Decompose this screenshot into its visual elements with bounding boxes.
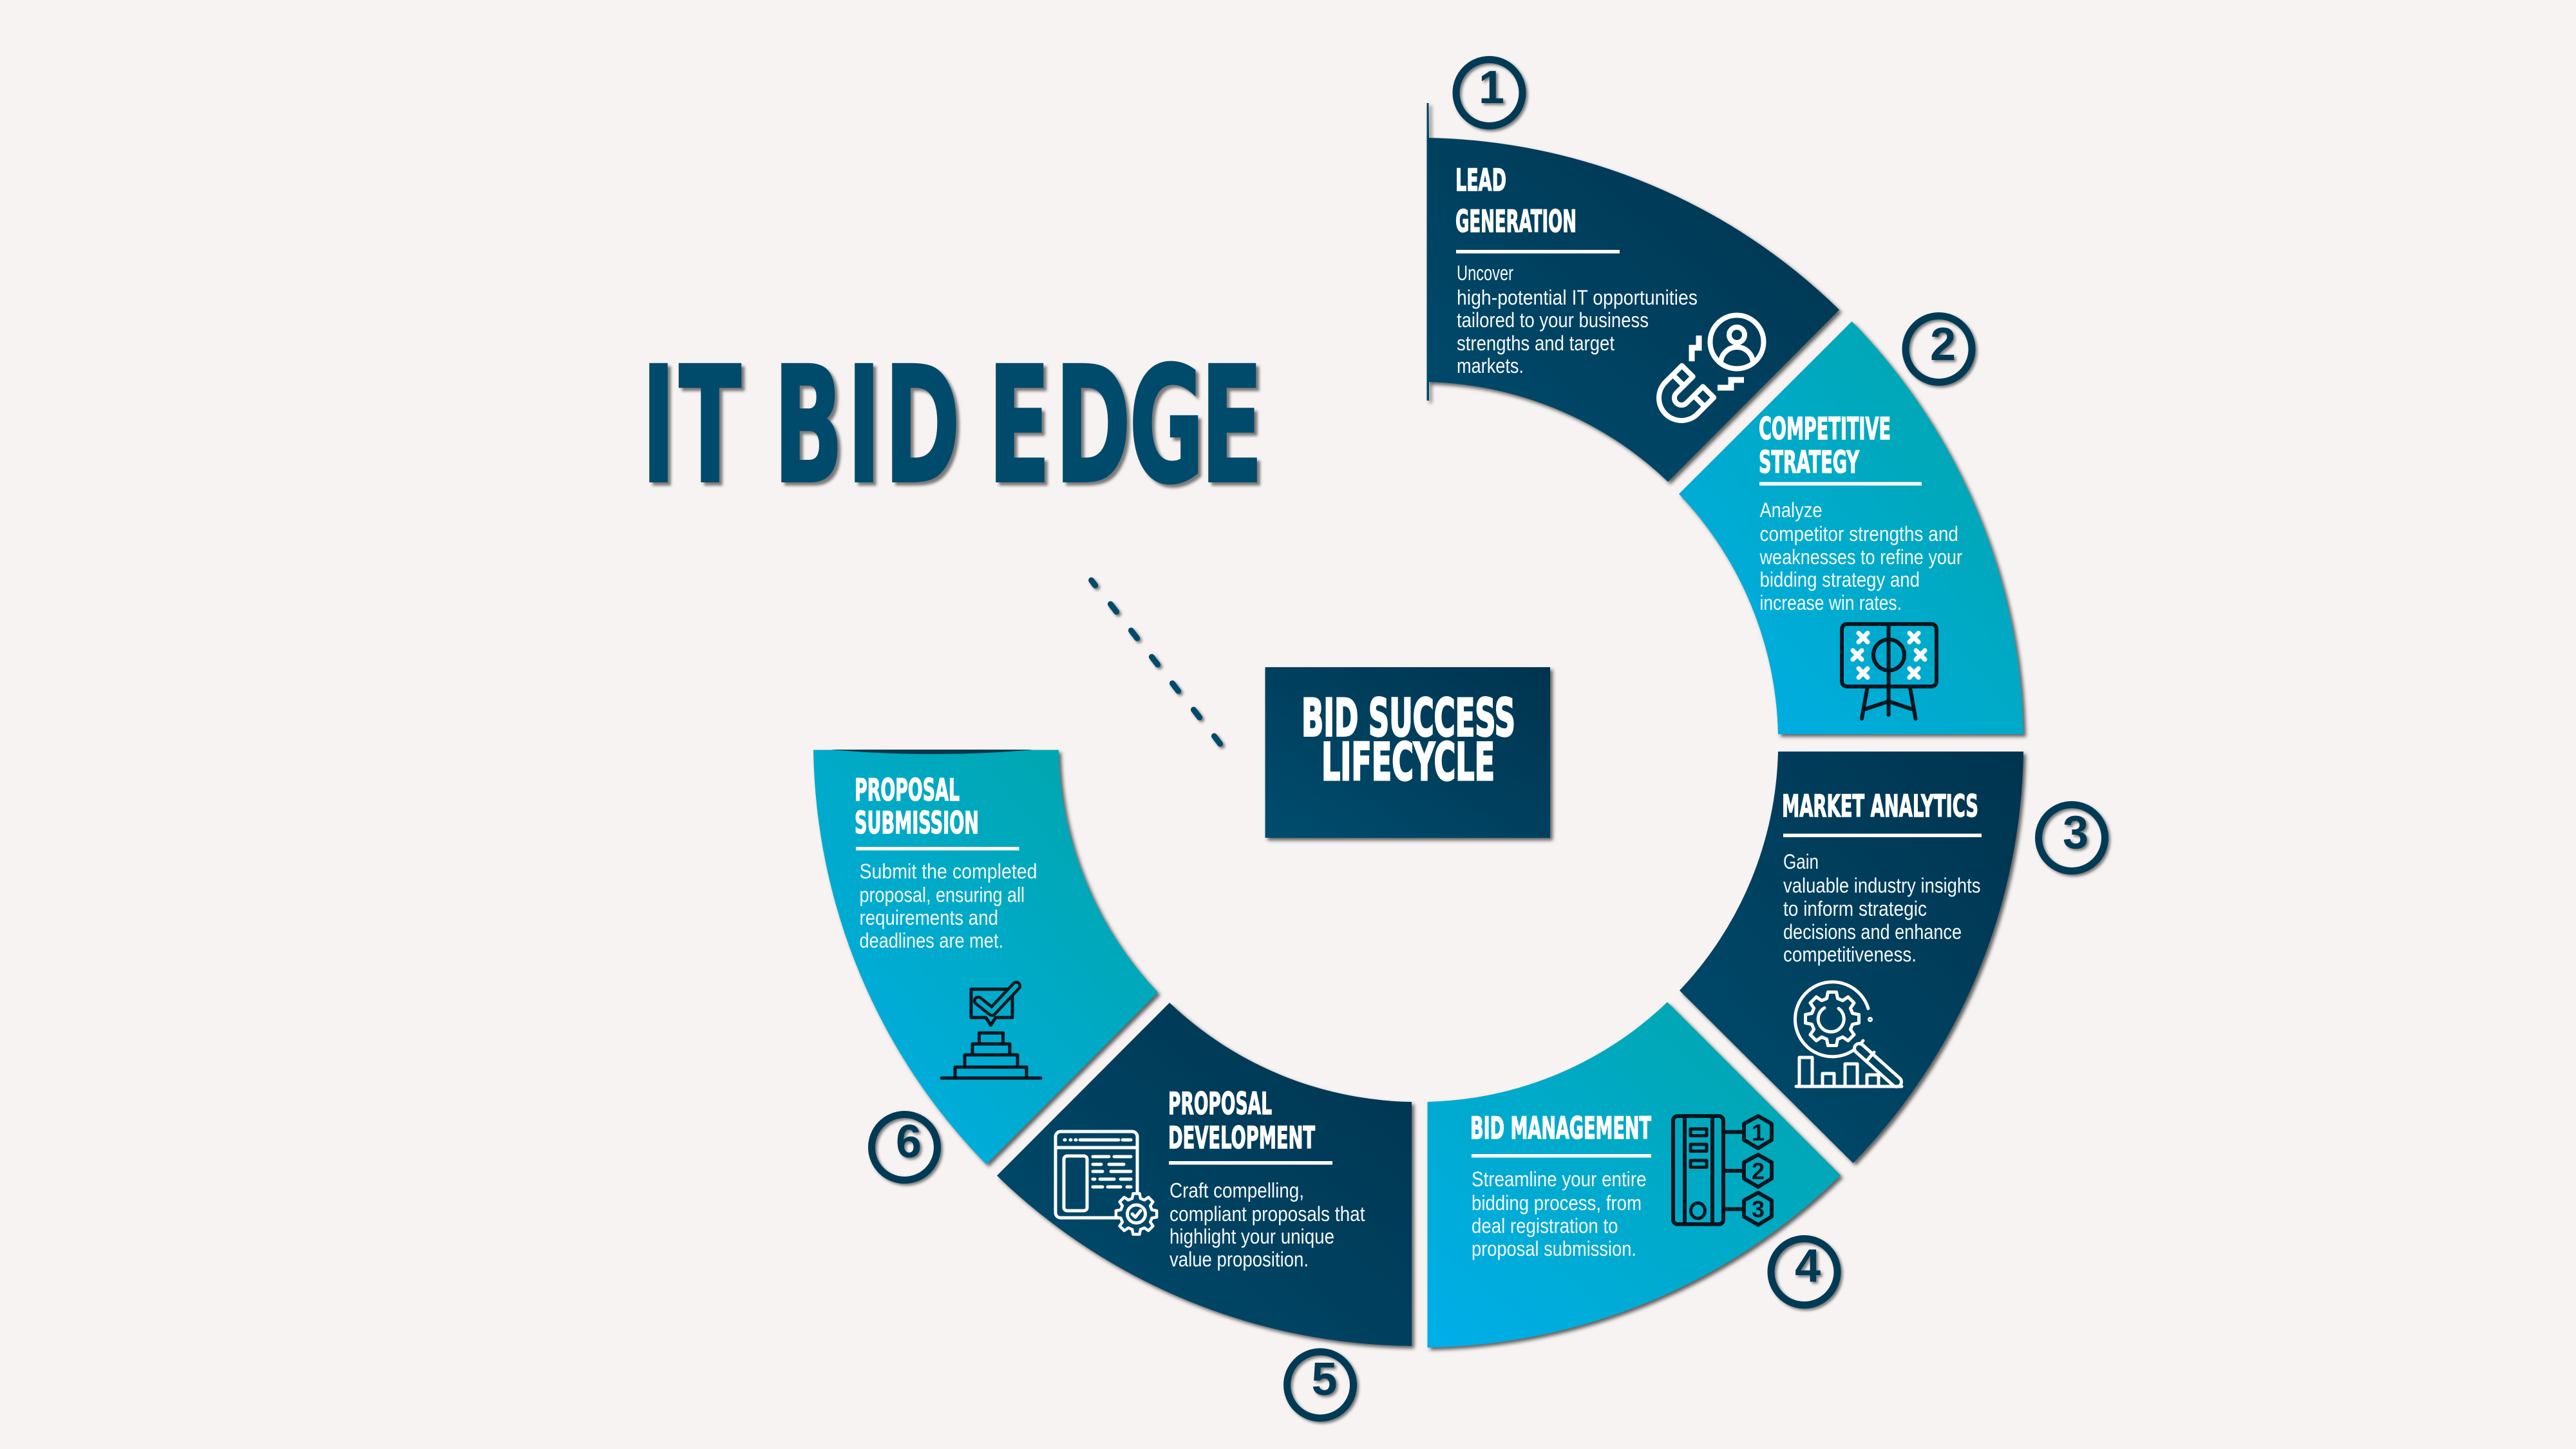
number badge 3: 3 [2063,807,2088,858]
body text: market analytics: competitiveness. [1783,943,1917,966]
icon: magnet attracting user [1650,316,1763,430]
body text: market analytics: decisions and enhance [1783,920,1962,943]
heading: proposal development [1168,1086,1315,1156]
body text: competitive strategy: increase win rates. [1759,591,1902,614]
body text: proposal development [1170,1179,1365,1271]
number badge 1 [1456,59,1522,126]
body text: bid management: deal registration to [1472,1215,1618,1238]
number badge 1: 1 [1479,62,1504,113]
center box: bid success lifecycle: LIFECYCLE [1321,732,1495,792]
body text: competitive strategy: bidding strategy and [1759,568,1920,591]
icon: numbered binder [1673,1116,1772,1225]
icon labels: binder numbers [1752,1119,1765,1222]
body text: proposal submission: requirements and [859,906,998,929]
body text: proposal submission: proposal, ensuring all [859,884,1025,907]
body text: lead generation: strengths and target [1457,332,1615,355]
icon labels: binder numbers: 3 [1752,1196,1765,1222]
panel: 6 proposal submission [813,750,1158,1164]
heading: proposal development: DEVELOPMENT [1168,1121,1315,1156]
number badge 2: 2 [1930,319,1956,370]
body text: bid management: bidding process, from [1472,1191,1642,1215]
number badge 3 [2039,805,2105,871]
body text: proposal submission: deadlines are met. [859,929,1003,952]
body text: lead generation: markets. [1457,354,1524,377]
number badge 6 [872,1114,938,1180]
number badge 4: 4 [1795,1240,1821,1292]
heading: market analytics: MARKET ANALYTICS [1782,789,1978,824]
body text: competitive strategy: Analyze [1759,498,1823,522]
heading: proposal submission: PROPOSAL [855,773,960,808]
number badge 2 [1906,316,1972,383]
body text: lead generation [1457,261,1698,377]
body text: market analytics: Gain [1783,850,1819,873]
body text: competitive strategy: competitor strengths and [1759,522,1958,545]
panel: 2 competitive strategy [1679,321,2023,734]
heading: lead generation: GENERATION [1455,204,1577,240]
icon: document window with gear [1056,1132,1157,1235]
body text: proposal submission: Submit the completed [859,860,1037,883]
center box: bid success lifecycle: BID SUCCESS [1302,688,1515,748]
heading: competitive strategy [1759,412,1891,480]
number badge 5: 5 [1311,1354,1338,1405]
body text: market analytics: to inform strategic [1783,897,1927,920]
heading: proposal development: PROPOSAL [1168,1086,1272,1122]
body text: proposal development: Craft compelling, [1170,1179,1304,1202]
number badge 5 [1287,1352,1354,1418]
panel: 4 bid management [1427,1002,1841,1347]
body text: market analytics [1783,850,1981,966]
center box: bid success lifecycle [1265,667,1550,838]
number badge 6: 6 [896,1116,922,1168]
body text: proposal development: value proposition. [1170,1248,1309,1271]
panel: 1 lead generation [1427,103,1839,482]
heading: proposal submission: SUBMISSION [855,806,979,841]
heading: bid management: BID MANAGEMENT [1470,1111,1651,1146]
body text: proposal submission [859,860,1037,952]
number badge 4 [1771,1239,1837,1305]
icon labels: binder numbers: 1 [1752,1119,1765,1146]
body text: proposal development: highlight your unique [1170,1225,1334,1248]
panel: 5 proposal development [997,1003,1412,1346]
icon: tactics board [1842,624,1937,719]
title: IT BID EDGE [641,332,1263,519]
icon: checkmark over steps [942,986,1041,1078]
icon labels: binder numbers: 2 [1752,1158,1765,1184]
heading: competitive strategy: COMPETITIVE [1759,412,1891,447]
body text: competitive strategy [1759,498,1962,614]
icon: magnifier with gear and bars [1795,982,1902,1086]
body text: market analytics: valuable industry insights [1783,874,1981,897]
panel: 3 market analytics [1680,752,2023,1163]
body text: bid management: proposal submission. [1472,1237,1636,1260]
heading: lead generation [1455,163,1577,240]
heading: lead generation: LEAD [1455,163,1506,198]
body text: bid management: Streamline your entire [1472,1168,1646,1191]
body text: bid management [1472,1168,1646,1260]
body text: lead generation: tailored to your business [1457,308,1649,332]
body text: lead generation: high-potential IT opportunities [1457,286,1698,309]
body text: competitive strategy: weaknesses to refine your [1759,545,1962,569]
body text: proposal development: compliant proposals that [1170,1202,1365,1226]
body text: lead generation: Uncover [1457,261,1513,285]
heading: competitive strategy: STRATEGY [1759,445,1860,480]
heading: proposal submission [855,773,979,841]
dashed connector line [1092,580,1220,744]
